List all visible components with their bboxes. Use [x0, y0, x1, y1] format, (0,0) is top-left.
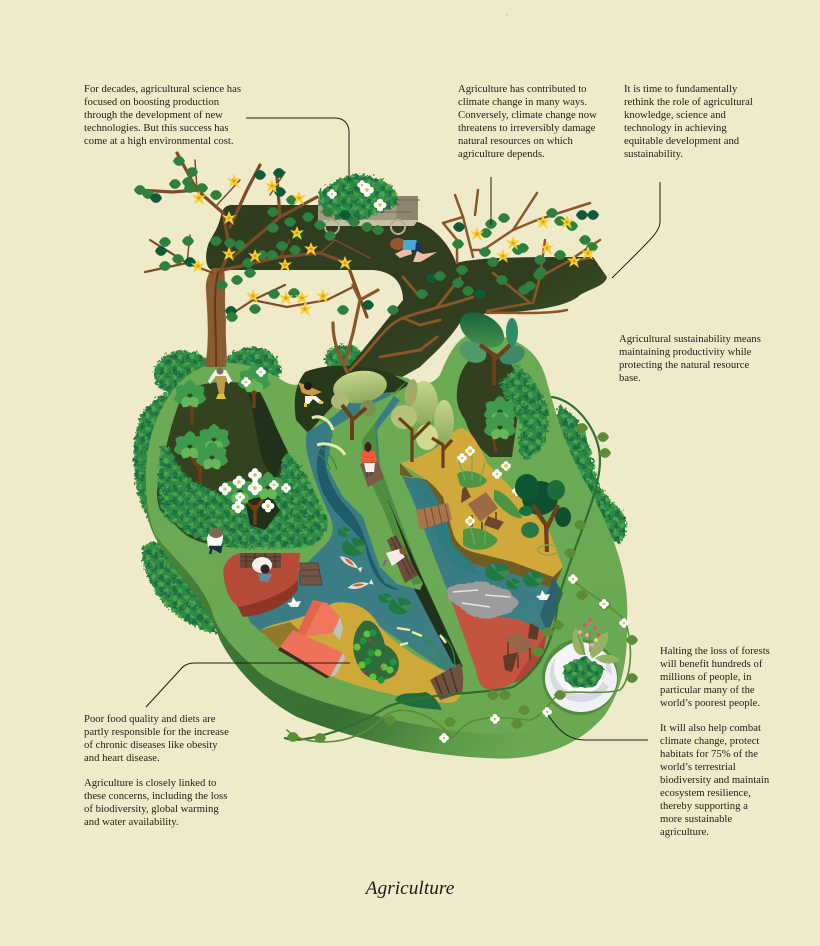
text block: boosting production: For decades, agricultural science has: [84, 83, 241, 95]
pale willow-like group: [391, 378, 454, 468]
teacup with plants: [542, 618, 620, 715]
leader line: top centre text: [490, 177, 492, 225]
text block: rethink: rethink the role of agricultural: [624, 96, 753, 108]
text block: boosting production: technologies. But this success has: [84, 122, 229, 134]
foliage on trees: [134, 156, 599, 322]
white vine flowers: [439, 574, 629, 743]
tall grass: [397, 628, 455, 670]
text block: sustainability: base.: [619, 372, 641, 384]
text block: forests: Halting the loss of forests: [660, 645, 770, 657]
dark road with branches: [206, 205, 607, 395]
cart loaded with bush: [317, 173, 420, 234]
house roof: [278, 600, 345, 678]
trees on light-green ridge: [331, 305, 527, 468]
text block: boosting production: through the development of new: [84, 109, 223, 121]
main terrain side wall: [146, 500, 627, 759]
text block: food quality: these concerns, including the loss: [84, 790, 227, 802]
text block: sustainability: [619, 333, 761, 384]
tree: large left tree: [137, 153, 370, 367]
text block: rethink: [624, 83, 753, 160]
red paved area: [452, 603, 547, 689]
text block: forests: millions of people, in: [660, 671, 751, 683]
text block: forests: world’s poorest people.: [660, 697, 760, 709]
text block: boosting production: focused on boosting production: [84, 96, 219, 108]
text block: food quality: and heart disease.: [84, 752, 160, 764]
text block: forests: [660, 645, 770, 838]
yellow-green crowned tree: [331, 367, 389, 440]
decorative speck: [506, 14, 508, 16]
text block: climate change: Agriculture has contributed to: [458, 83, 587, 95]
panel: right garden pit: [457, 352, 547, 457]
text block: forests: world’s terrestrial: [660, 761, 736, 773]
text block: forests: particular many of the: [660, 684, 755, 696]
text block: climate change: [458, 83, 597, 160]
tree: branches over the road: [333, 190, 600, 372]
teal-crowned tree in upper hump: [454, 305, 527, 385]
figure: person with white top at pit edge: [207, 528, 223, 554]
figures: [207, 368, 418, 583]
leader line: bottom right text: [548, 715, 648, 740]
text block: forests: ecosystem resilience,: [660, 787, 751, 799]
text block: food quality: of chronic diseases like obesity: [84, 739, 218, 751]
leader line: bottom left text: [146, 663, 350, 707]
text block: rethink: It is time to fundamentally: [624, 83, 737, 95]
text block: rethink: sustainability.: [624, 148, 683, 160]
text block: food quality: Agriculture is closely linked to: [84, 777, 216, 789]
text block: climate change: threatens to irreversibly damage: [458, 122, 595, 134]
text block: food quality: Poor food quality and diets are: [84, 713, 216, 725]
text block: sustainability: maintaining productivity while: [619, 346, 751, 358]
lily pads: [485, 563, 509, 581]
main terrain top surface: [146, 333, 627, 734]
table and chairs: [503, 623, 539, 672]
leader line: top right text: [612, 182, 660, 278]
figure: woman in red on small deck: [360, 442, 384, 487]
left pond details: lily pads, koi and paper boat: [287, 417, 412, 615]
text block: forests: agriculture.: [660, 826, 709, 838]
text block: boosting production: [84, 83, 241, 147]
wooden steps: [430, 663, 463, 700]
vines: [285, 397, 638, 743]
grey rocks: [447, 581, 518, 618]
text block: forests: more sustainable: [660, 813, 732, 825]
text block: food quality: and water availability.: [84, 816, 179, 828]
text block: climate change: natural resources on which: [458, 135, 573, 147]
leader line: top left text: [246, 118, 349, 180]
text block: forests: thereby supporting a: [660, 800, 748, 812]
yellow flowers on branches: [191, 174, 595, 316]
bridge: [416, 503, 452, 530]
central island strip: [327, 393, 423, 590]
text block: forests: climate change, protect: [660, 735, 759, 747]
woman lying on the road: [390, 238, 437, 262]
text block: forests: will benefit hundreds of: [660, 658, 762, 670]
picnic table: [461, 485, 504, 532]
vegetable patch: [353, 621, 399, 684]
text block: sustainability: protecting the natural resource: [619, 359, 749, 371]
left water: [245, 392, 463, 677]
text block: climate change: climate change in many ways.: [458, 96, 587, 108]
text block: rethink: knowledge, science and: [624, 109, 726, 121]
figure: person in tan shirt and white trousers: [298, 382, 324, 407]
text block: rethink: equitable development and: [624, 135, 739, 147]
panel: yellow island with picnic table: [400, 428, 571, 589]
figure: farmer in tan trousers: [208, 368, 232, 399]
text block: food quality: [84, 713, 229, 828]
side wall of central strip: [366, 380, 463, 667]
panel: red platform with bench: [223, 553, 322, 617]
water shadow beside island: [317, 440, 400, 590]
figure: person on long bench: [383, 535, 418, 583]
text block: forests: biodiversity and maintain: [660, 774, 769, 786]
panel: left garden pit: [156, 365, 325, 547]
text block: food quality: of biodiversity, global warming: [84, 803, 219, 815]
text block: boosting production: come at a high environmental cost.: [84, 135, 234, 147]
title: Agriculture: [366, 878, 454, 899]
text block: climate change: Conversely, climate change now: [458, 109, 597, 121]
panel: yellow garden with house: [260, 600, 463, 710]
text block: sustainability: Agricultural sustainability means: [619, 333, 761, 345]
panel: right pond: [402, 476, 563, 689]
back bushes: [132, 343, 625, 632]
text block: food quality: partly responsible for the increase: [84, 726, 229, 738]
text block: forests: habitats for 75% of the: [660, 748, 758, 760]
text block: rethink: technology in achieving: [624, 122, 727, 134]
dark hill above the channel: [295, 366, 410, 433]
text block: forests: It will also help combat: [660, 722, 761, 734]
hedge around the pit: [156, 444, 325, 547]
dark-crowned tree: [515, 474, 571, 555]
shrubs and white flowering tree: [173, 365, 291, 525]
text block: climate change: agriculture depends.: [458, 148, 545, 160]
panel: water channels: [245, 366, 463, 677]
